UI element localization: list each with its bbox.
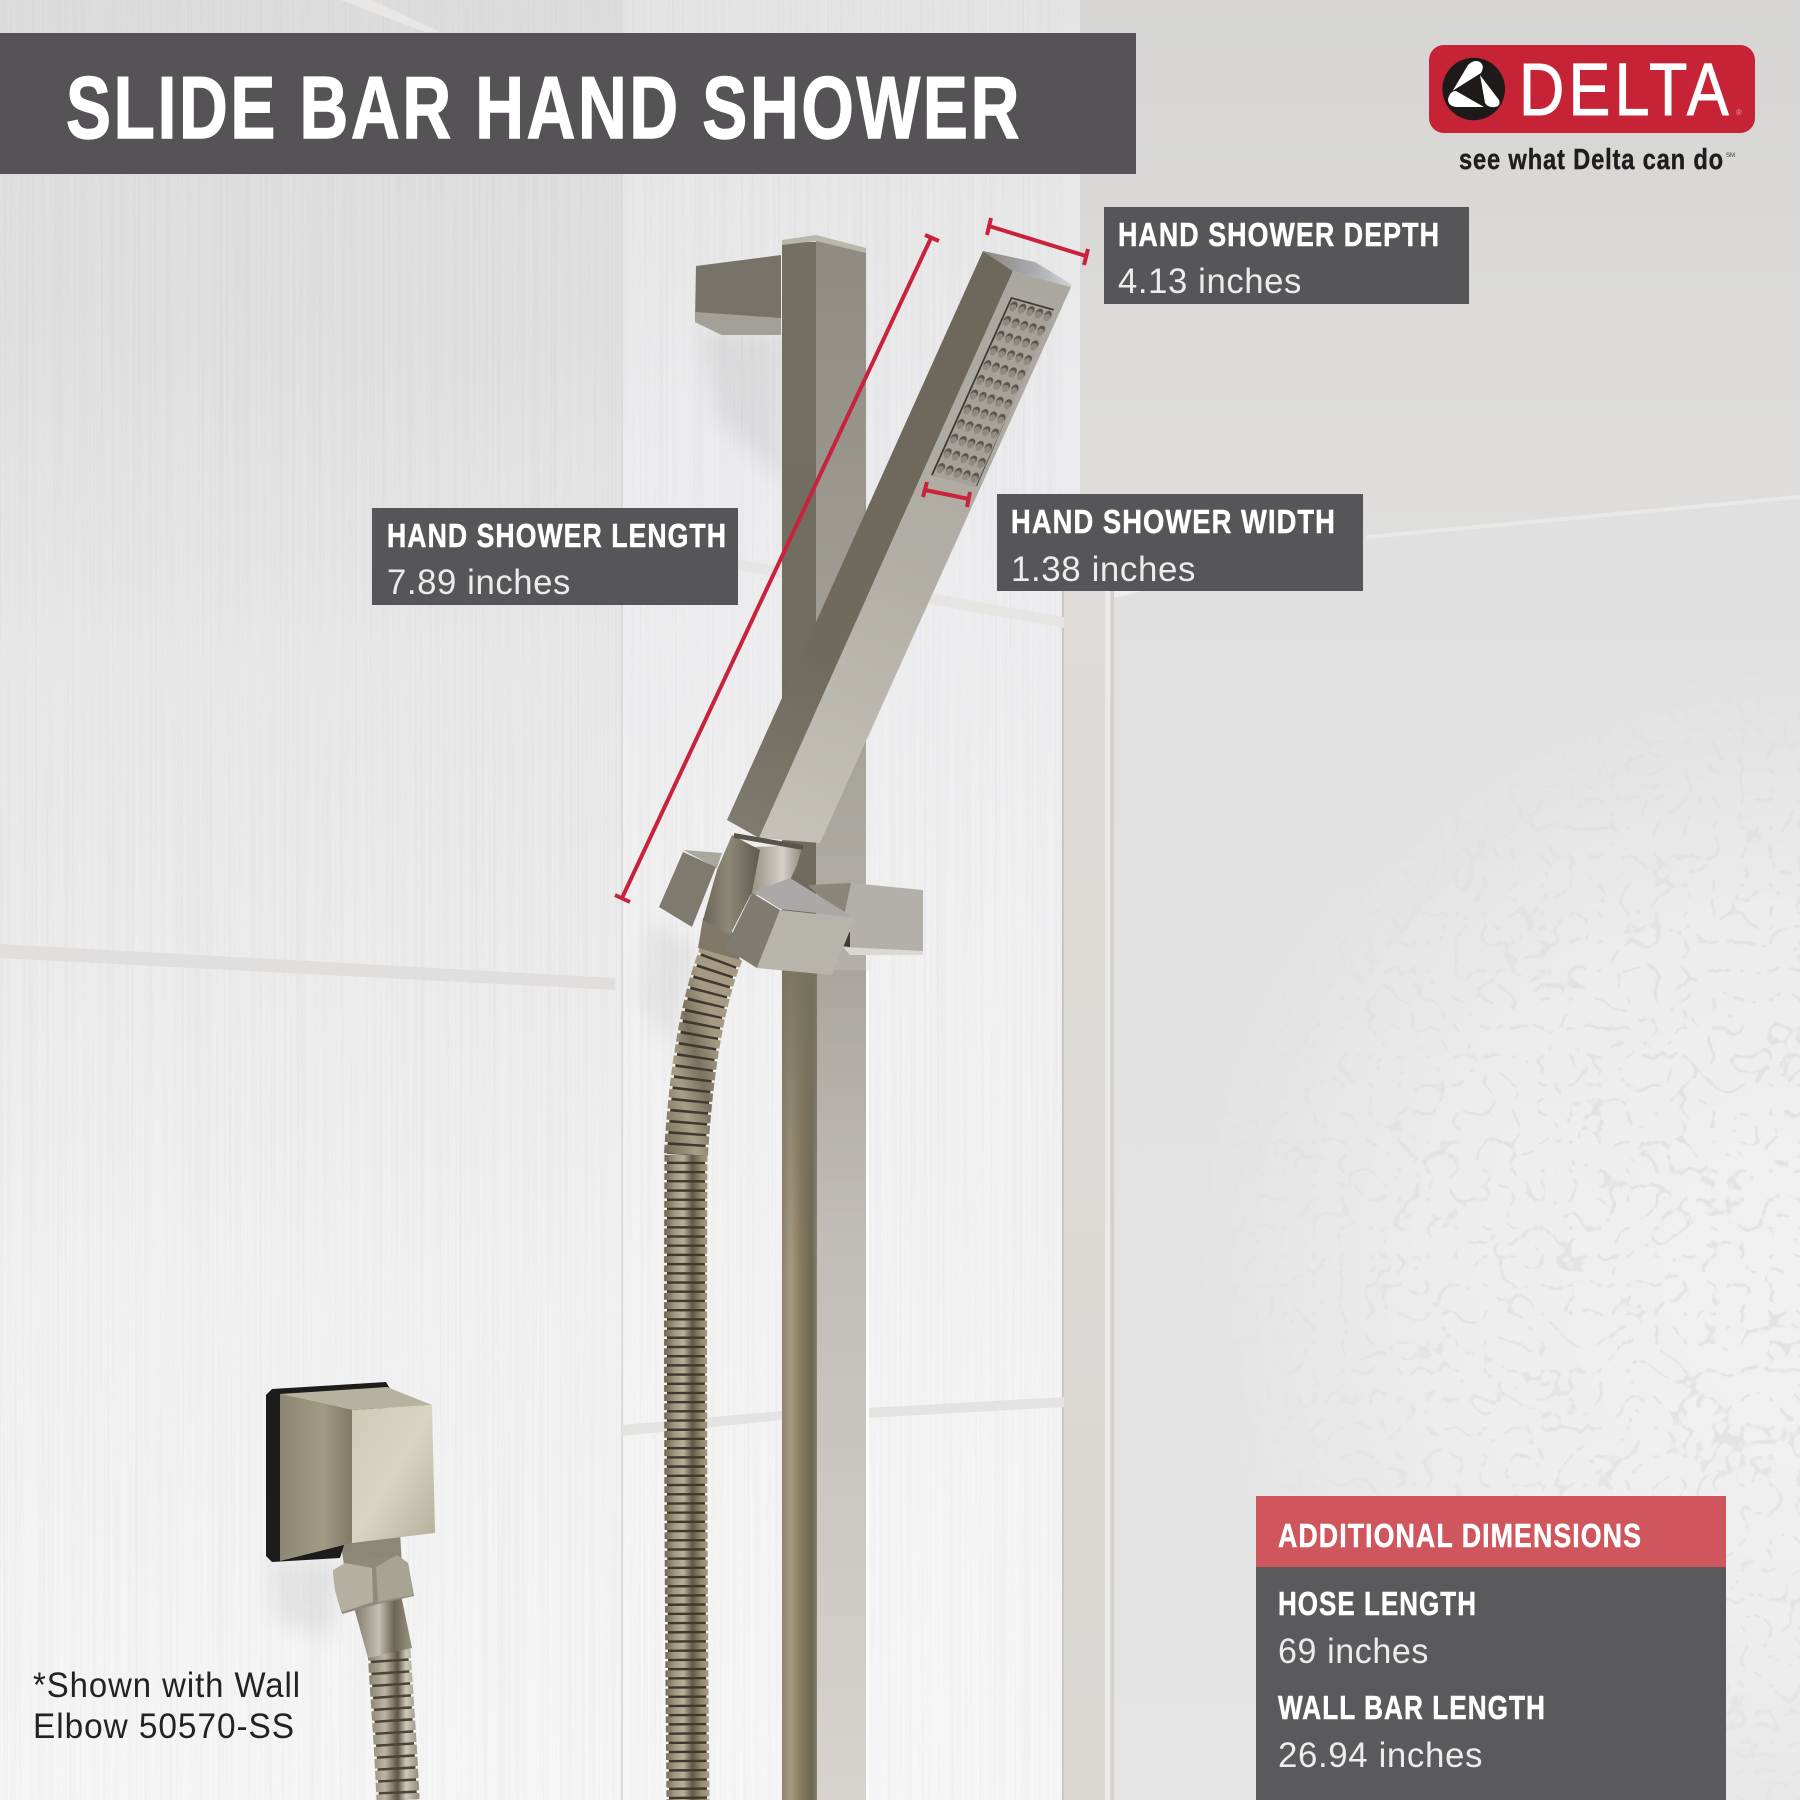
hose length: HOSE LENGTH [1278,1585,1477,1622]
panel body [1256,1567,1726,1800]
registered mark: ® [1736,108,1742,117]
left cube [683,850,722,868]
top cap [983,251,1071,287]
dark face [280,1394,352,1561]
front clamp light face [757,910,855,975]
dark side face [727,251,1013,838]
slide bar [782,235,869,1800]
wall bar length: 26.94 inches [1278,1736,1483,1775]
glass top [753,878,853,917]
neck [745,845,803,895]
tube [352,1590,412,1658]
panel header [1256,1496,1726,1567]
footnote: *Shown with Wall [33,1666,301,1705]
hose length [1278,1585,1477,1671]
label: hand shower width: HAND SHOWER WIDTH [1011,503,1336,540]
title: SLIDE BAR HAND SHOWER [66,58,1022,157]
service mark: SM [1726,153,1735,159]
Delta logo [1429,45,1755,176]
slider clamp [659,833,923,975]
label: hand shower length [372,508,738,605]
bar cap [782,235,866,253]
panel: additional dimensions [1256,1496,1726,1800]
bar left face lower [782,970,817,1800]
wall shadows [268,330,782,1640]
backing plate [266,1382,392,1562]
bar left face upper [782,242,816,982]
light face [352,1405,435,1543]
label: hand shower length: 7.89 inches [387,563,571,602]
label: hand shower width: 1.38 inches [1011,550,1196,589]
bar right face lower [817,970,866,1800]
wall bar length [1278,1689,1546,1775]
label: hand shower length: HAND SHOWER LENGTH [387,517,727,554]
wall bar length: WALL BAR LENGTH [1278,1689,1546,1726]
swivel collar [703,835,760,935]
light front face [759,271,1071,843]
footnote [33,1666,301,1746]
label: hand shower depth [1104,207,1469,304]
elbow hose [389,1650,398,1800]
top face [280,1387,432,1410]
bar right face upper [816,238,866,980]
title banner [0,33,1136,174]
length line [615,235,939,902]
wall elbow [266,1382,435,1800]
right block [808,883,851,915]
tagline: see what Delta can do [1459,144,1724,176]
front clamp dark face [725,893,780,968]
label: hand shower depth: 4.13 inches [1118,262,1302,301]
spray face [931,297,1054,487]
icon: delta mark [1442,58,1505,120]
footnote: Elbow 50570-SS [33,1707,295,1746]
label: hand shower depth: HAND SHOWER DEPTH [1118,216,1440,253]
wordmark: DELTA [1519,48,1733,131]
thread [340,1533,402,1572]
hose head [698,918,740,960]
depth line [987,218,1088,265]
measurement lines [615,218,1088,902]
panel header: ADDITIONAL DIMENSIONS [1278,1517,1642,1554]
hose length: 69 inches [1278,1632,1429,1671]
top wall bracket [695,255,781,335]
width line [923,482,970,507]
nut [333,1555,414,1614]
hose [686,952,722,1800]
hand shower [727,251,1071,843]
label: hand shower width [997,494,1363,591]
